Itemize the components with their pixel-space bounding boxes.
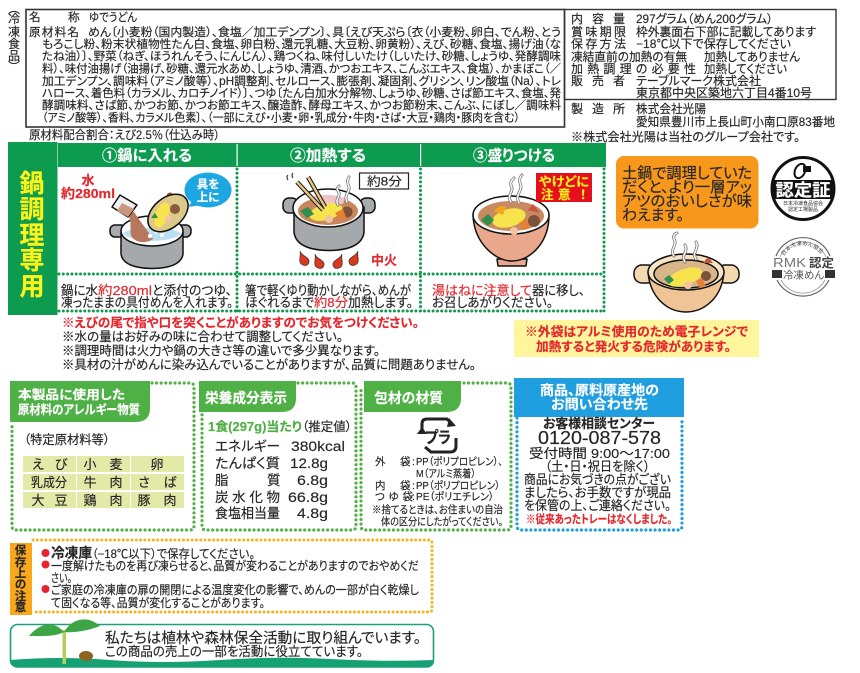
vertical label: frozen food xyxy=(8,2,20,74)
step 1 text: 約280ml xyxy=(98,283,152,298)
storage notes: ご家庭の冷凍庫の扉の開閉による温度変化の影響で、めんの一部が白く乾燥し xyxy=(51,582,419,597)
packaging materials text: つゆ袋 xyxy=(375,490,414,503)
step 1 text: 鍋に水 xyxy=(61,283,98,298)
panel: product details: 凍結直前の加熱の有無 xyxy=(571,49,687,64)
allergen table: さ xyxy=(138,475,150,490)
storage tag: 上 xyxy=(15,567,27,580)
step 2 text xyxy=(245,283,413,310)
panel: allergens xyxy=(10,381,194,530)
panel: product details: 株式会社光陽 xyxy=(636,101,706,116)
panel: product details: 者 xyxy=(613,74,625,88)
step 1 text: と添付のつゆ、 xyxy=(152,283,232,298)
panel: packaging materials xyxy=(361,381,511,530)
icon: pot with water xyxy=(110,187,195,268)
panel: ingredient list: ハロース、着色料（カラメル、カロチノイド）〕、つゆ〔たん白加水分解物、しょうゆ、砂糖、さば節エキス、食塩、発 xyxy=(42,86,561,100)
panel: ingredient list: めん〔小麦粉（国内製造）、食塩／加工デンプン〕、具〔えび天ぷら〔衣（小麦粉、卵白、でん粉、とう xyxy=(88,25,561,39)
step headers: ③盛りつける xyxy=(473,146,555,164)
seal: RMK frozen noodles: 冷凍めん xyxy=(783,268,824,282)
icon: bowl of udon xyxy=(473,175,549,266)
icon: flames xyxy=(300,251,358,268)
step 3 text: お召しあがりください。 xyxy=(432,295,553,310)
storage tag: の xyxy=(15,579,26,591)
nutrition table: 66.8g xyxy=(288,490,328,505)
icon: plastic recycling mark: プラ xyxy=(425,429,451,447)
allergen table: 麦 xyxy=(109,457,123,472)
packaging materials text: : xyxy=(412,456,415,468)
seal: certification: 認定証 xyxy=(776,181,830,200)
contact header: 商品、原料原産地の xyxy=(540,382,659,398)
packaging materials text: PP（ポリプロピレン）、 xyxy=(416,456,503,468)
icon: pot with chopsticks xyxy=(283,173,375,250)
panel: product details: 加熱してありません xyxy=(704,50,800,64)
banner message: この商品の売上の一部を活動に役立てています。 xyxy=(105,644,363,659)
warning: microwave danger: ※外袋はアルミ使用のため電子レンジで xyxy=(525,324,748,339)
panel: ingredient list xyxy=(26,10,564,127)
nutrition header: 栄養成分表示 xyxy=(205,390,287,406)
serving size: （推定値） xyxy=(302,419,352,434)
banner message: 私たちは植林や森林保全活動に取り組んでいます。 xyxy=(105,630,421,647)
storage tag: 注 xyxy=(15,589,27,603)
allergen table: 鶏 xyxy=(83,493,97,508)
callout: clay pot tip: アツのおいしさが味 xyxy=(622,193,752,210)
panel: storage precautions xyxy=(10,540,432,615)
packaging materials text: 内 xyxy=(375,479,386,492)
panel: product details: ※株式会社光陽は当社のグループ会社です。 xyxy=(571,129,800,144)
icon: sprout and seed xyxy=(29,619,100,664)
panel: product details: 愛知県豊川市上長山町小南口原83番地 xyxy=(636,114,835,129)
icon: plastic recycling mark xyxy=(417,418,456,452)
step 3 text xyxy=(432,283,585,310)
contact details: 商品にお気づきの点がござい xyxy=(524,472,671,487)
panel: product details: 東京都中央区築地六丁目4番10号 xyxy=(636,85,812,100)
panel: product details: 賞味期限 xyxy=(571,25,626,39)
vertical label: frozen food: 冷 xyxy=(8,12,20,26)
packaging header xyxy=(364,381,461,412)
nutrition table: 380kcal xyxy=(291,439,345,454)
step headers: ①鍋に入れる xyxy=(102,146,192,164)
step headers xyxy=(58,143,606,167)
step 1 illustration: 水 xyxy=(81,173,95,188)
step 2 text: 箸で軽くゆり動かしながら、めんが xyxy=(245,283,411,298)
callout: clay pot tip: わえます。 xyxy=(622,207,684,224)
side tab: pot cooking only: 理 xyxy=(19,222,45,250)
panel: ingredient list: （アミノ酸等）、香料、カラメル色素〕、（一部にえび・小麦・卵・乳成分・牛肉・さば・大豆・鶏肉・豚肉を含む） xyxy=(42,110,520,124)
packaging materials text: 体の区分にしたがってください。 xyxy=(381,515,503,528)
callout: clay pot tip xyxy=(616,156,758,228)
step 1 illustration xyxy=(61,172,232,268)
packaging materials text: 袋 xyxy=(400,455,411,468)
contact details: を保管の上、ご連絡ください。 xyxy=(524,498,671,513)
panel: product details: 所 xyxy=(613,102,625,116)
step 2 text: ほぐれるまで xyxy=(245,295,315,310)
panel: ingredient list: 称 xyxy=(68,11,80,24)
allergen table: 卵 xyxy=(150,457,164,472)
serving size: 1食(297g)当たり xyxy=(208,419,302,434)
side tab: pot cooking only: 専 xyxy=(19,247,45,275)
nutrition table: たんぱく質 xyxy=(215,456,280,471)
nutrition table: 脂 xyxy=(215,473,228,488)
step headers: ②加熱する xyxy=(290,146,366,164)
packaging materials text: PE（ポリエチレン） xyxy=(416,491,494,503)
packaging header: 包材の材質 xyxy=(374,390,443,406)
packaging materials text: ※捨てるときは、お住まいの自治 xyxy=(372,503,503,516)
allergen table: 乳成分 xyxy=(31,475,67,490)
serving size xyxy=(208,419,352,434)
icon: clay pot xyxy=(634,233,739,312)
warning: beware of burns xyxy=(536,173,592,202)
side tab: pot cooking only: 用 xyxy=(19,273,45,301)
storage notes xyxy=(42,545,419,610)
storage notes: 一度解けたものを再び凍らせると、品質が変わることがありますのでおやめくだ xyxy=(51,558,419,573)
vertical label: frozen food: ︶ xyxy=(8,60,20,74)
panel: product details: 容 xyxy=(592,12,604,26)
allergen table: 肉 xyxy=(109,493,123,508)
seal: certification: 認定工場製品 xyxy=(788,206,818,213)
callout: ingredients on top: 具を xyxy=(197,178,219,191)
allergen table: 肉 xyxy=(163,493,177,508)
contact header xyxy=(514,378,684,417)
storage notes: （−18℃以下）で保存してください。 xyxy=(92,547,255,561)
panel: ingredient list: 料）、味付油揚げ（油揚げ、砂糖、還元水あめ、しょうゆ、清酒、かつおエキス、こんぶエキス、食塩）、かまぼこ（／ xyxy=(42,62,561,76)
nutrition table: 食塩相当量 xyxy=(215,506,280,521)
allergen table: び xyxy=(55,457,68,472)
panel: nutrition facts xyxy=(199,381,356,530)
contact details xyxy=(524,416,672,526)
storage notes: 冷凍庫 xyxy=(51,545,92,561)
panel: product details: 売 xyxy=(592,73,604,88)
step 2 text: 加熱します。 xyxy=(348,295,413,310)
seal: RMK frozen noodles: 日本冷凍めん協会 xyxy=(781,240,823,256)
panel: product details xyxy=(564,10,836,144)
packaging materials text: : xyxy=(412,491,415,503)
seal: RMK frozen noodles xyxy=(772,237,835,297)
cooking notes: ※調理時間は火力や鍋の大きさ等の違いで多少異なります。 xyxy=(62,343,380,358)
ingredient ratio: 原材料配合割合：えび2.5％（仕込み時） xyxy=(29,128,220,142)
panel: product details: 加熱調理の必要性 xyxy=(571,62,696,76)
panel: ingredient list: 原材料名 xyxy=(29,25,79,39)
warning: microwave danger: 加熱すると発火する危険があります。 xyxy=(536,339,731,354)
storage notes: さい。 xyxy=(51,571,72,585)
panel: product details: −18℃以下で保存してください xyxy=(636,37,791,51)
panel: ingredient list: ゆでうどん xyxy=(89,11,137,24)
warning: beware of burns: 注 xyxy=(541,187,554,202)
panel: product details: 製 xyxy=(571,102,583,116)
allergen table: 豚 xyxy=(137,493,151,508)
contact details: 受付時間 9:00〜17:00 xyxy=(529,446,670,461)
vertical label: frozen food: 品 xyxy=(8,49,20,63)
packaging materials text: 外 xyxy=(375,456,386,468)
panel: product details: 造 xyxy=(592,102,604,116)
warning: beware of burns: ！ xyxy=(580,188,586,202)
packaging materials text: : xyxy=(412,480,415,492)
contact details: ましたら、お手数ですが現品 xyxy=(524,485,671,500)
cooking notes xyxy=(62,315,476,372)
nutrition table xyxy=(215,439,345,521)
time label: about 8 minutes: 約8分 xyxy=(367,174,402,188)
banner message xyxy=(105,630,421,659)
nutrition table: 炭水化物 xyxy=(215,490,280,505)
warning: microwave danger xyxy=(514,320,759,357)
panel: product details: 297グラム（めん200グラム） xyxy=(636,12,773,26)
contact details: お客様相談センター xyxy=(543,416,655,431)
step 3 text: 湯はねに注意して xyxy=(432,283,532,298)
panel: ingredient list: 名 xyxy=(29,10,41,24)
warning: beware of burns: やけどに xyxy=(539,174,589,189)
panel: customer contact xyxy=(514,378,684,530)
nutrition header xyxy=(199,381,296,412)
nutrition table: 質 xyxy=(267,473,280,488)
panel: product details: 量 xyxy=(613,12,625,26)
step 1 illustration: 約280ml xyxy=(61,186,115,201)
seal: RMK frozen noodles: RMK xyxy=(773,255,806,270)
callout: ingredients on top: 上に xyxy=(197,191,219,204)
cooking notes: ※えびの尾で指や口を突くことがありますのでお気をつけください。 xyxy=(62,315,419,330)
panel: product details: 加熱してください xyxy=(704,62,787,76)
panel: ingredient list: たね油）〕、野菜（ねぎ、ほうれんそう、にんじん）、鶏つくね、味付しいたけ（しいたけ、砂糖、しょうゆ、発酵調味 xyxy=(42,49,561,63)
panel: forest conservation banner xyxy=(10,619,434,667)
allergen header: 本製品に使用した xyxy=(18,387,125,402)
step 2 illustration xyxy=(283,173,408,268)
storage tag: 存 xyxy=(15,555,27,569)
allergen table xyxy=(23,456,184,508)
contact details: （土・日・祝日を除く） xyxy=(545,459,650,474)
callout: clay pot tip: だくと、より一層アッ xyxy=(622,179,752,196)
seal: RMK frozen noodles: 認定 xyxy=(809,256,834,270)
allergen header xyxy=(10,381,150,422)
side tab: pot cooking only xyxy=(8,142,58,315)
callout: ingredients on top xyxy=(184,172,232,208)
nutrition table: 6.8g xyxy=(297,473,328,488)
allergen table: 豆 xyxy=(54,493,68,508)
allergen table: 牛 xyxy=(83,475,97,490)
step 3 text: 器に移し、 xyxy=(532,283,585,298)
step 1 text xyxy=(61,283,233,310)
allergen table: 大 xyxy=(31,493,45,508)
panel: product details: 保存方法 xyxy=(571,36,626,51)
side tab: pot cooking only: 鍋 xyxy=(19,170,45,198)
panel: product details: 枠外裏面右下部に記載してあります xyxy=(636,24,816,39)
packaging materials text: PP（ポリプロピレン） xyxy=(416,480,500,492)
vertical label: frozen food: 凍 xyxy=(8,25,20,39)
allergen table: え xyxy=(32,457,44,472)
panel: allergens: （特定原材料等） xyxy=(24,432,110,447)
step 2 illustration: 中火 xyxy=(371,253,397,268)
callout: clay pot tip: 土鍋で調理していた xyxy=(622,165,752,182)
vertical label: frozen food: ︵ xyxy=(8,2,20,16)
allergen table: 小 xyxy=(83,457,97,472)
side tab: pot cooking only: 調 xyxy=(19,196,45,224)
panel: ingredient list: 加工デンプン、調味料（アミノ酸等）、pH調整剤、セルロース、膨張剤、凝固剤、グリシン、リン酸塩（Na）、トレ xyxy=(42,74,561,88)
panel: ingredient list: 酵調味料、さば節、かつお節、かつお節エキス、醸造酢、酵母エキス、かつお節粉末、こんぶ、にぼし／調味料 xyxy=(42,98,561,112)
panel: cooking instructions xyxy=(8,142,606,315)
panel: product details: テーブルマーク株式会社 xyxy=(636,73,761,88)
allergen table: ば xyxy=(163,475,177,490)
vertical label: frozen food: 食 xyxy=(8,37,20,51)
storage notes: て固くなる等、品質が変化することがあります。 xyxy=(51,595,265,610)
cooking notes: ※水の量はお好みの味に合わせて調整してください。 xyxy=(62,330,343,344)
nutrition table: 4.8g xyxy=(297,506,328,521)
storage tag xyxy=(10,543,32,615)
packaging materials text: M（アルミ蒸着） xyxy=(416,467,476,480)
packaging materials text: 袋 xyxy=(400,479,411,492)
seal: certification: 日本冷凍食品協会 xyxy=(783,200,823,207)
allergen table: 肉 xyxy=(109,475,123,490)
panel: ingredient list: もろこし粉、粉末状植物性たん白、食塩、卵白粉、還元乳糖、大豆粉、卵黄粉）、えび、砂糖、食塩、揚げ油（な xyxy=(42,37,561,51)
contact header: お問い合わせ先 xyxy=(551,396,648,412)
storage tag: 意 xyxy=(15,601,27,614)
allergen header: 原材料のアレルギー物質 xyxy=(18,402,140,417)
storage tag: 保 xyxy=(15,544,27,557)
seal: certification xyxy=(772,158,834,220)
step 3 illustration xyxy=(473,173,592,266)
nutrition table: 12.8g xyxy=(290,456,328,471)
contact details: 0120-087-578 xyxy=(538,428,661,448)
contact details: ※従来あったトレーはなくしました。 xyxy=(526,512,672,526)
cooking notes: ※具材の汁がめんに染み込んでいることがありますが、品質に問題ありません。 xyxy=(62,357,476,372)
nutrition table: エネルギー xyxy=(215,439,280,454)
step 1 text: 凍ったままの具付めんを入れます。 xyxy=(61,295,233,310)
warning: beware of burns: 意 xyxy=(558,187,571,202)
panel: product details: 内 xyxy=(571,12,583,26)
panel: product details: 販 xyxy=(571,74,583,88)
packaging materials text xyxy=(372,455,503,528)
step 2 text: 約8分 xyxy=(314,295,348,310)
